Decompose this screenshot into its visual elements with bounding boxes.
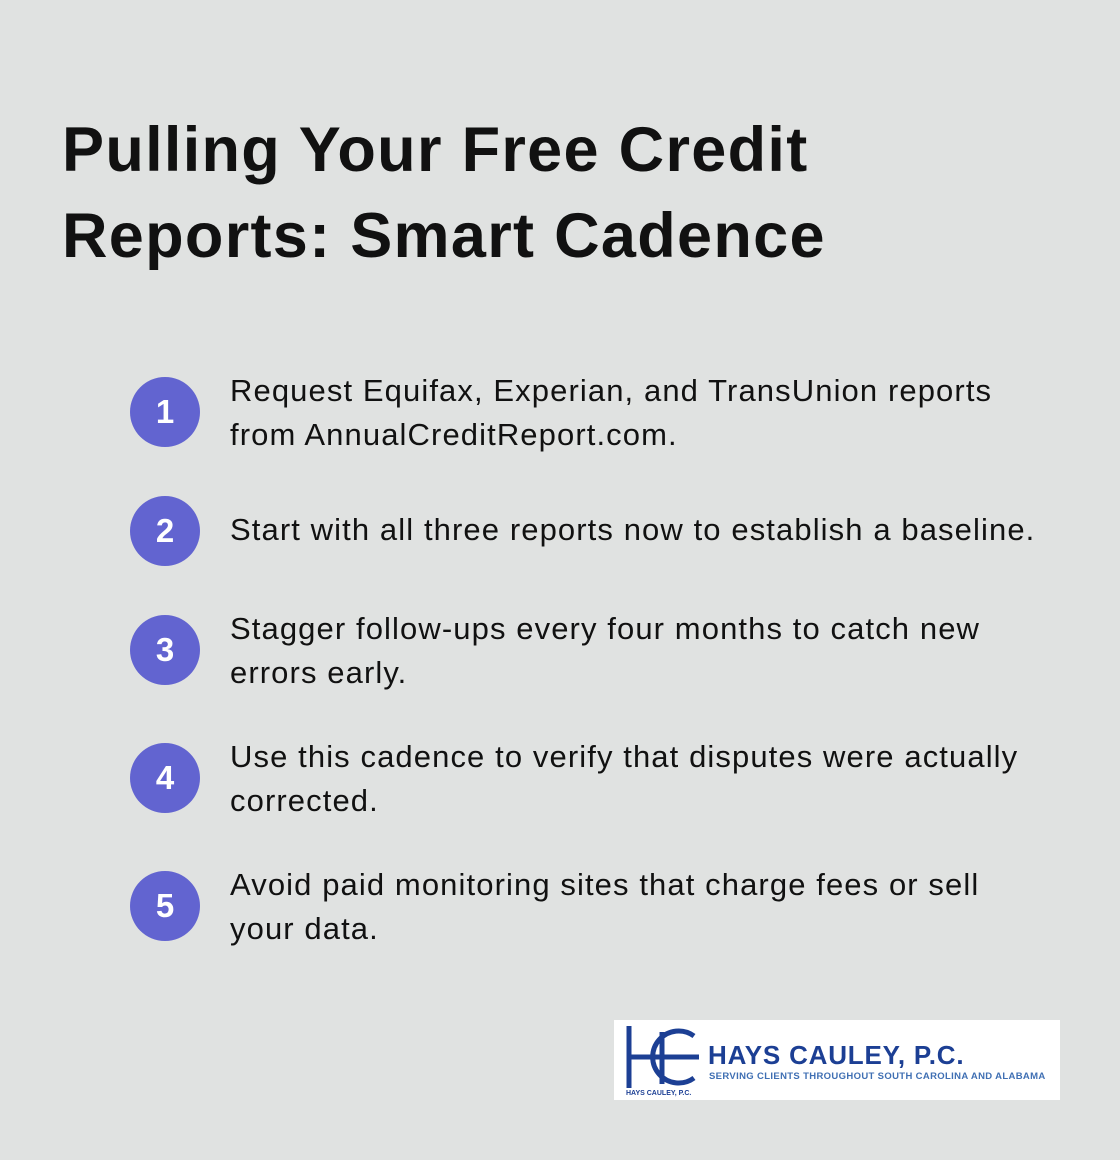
text 1: Request Equifax, Experian, and TransUnion reports (230, 373, 992, 408)
badge 1: 1 (156, 393, 174, 430)
text 4 (230, 739, 1018, 818)
logo mark (626, 1026, 699, 1088)
logo small text: HAYS CAULEY, P.C. (626, 1090, 691, 1097)
text 1 (230, 373, 992, 452)
badge 1 (130, 377, 200, 447)
title: Pulling Your Free Credit (62, 115, 808, 185)
badge 4: 4 (156, 759, 174, 796)
item 2 (130, 496, 1035, 566)
item 1 (130, 373, 992, 452)
text 1: from AnnualCreditReport.com. (230, 417, 678, 452)
badge 2: 2 (156, 512, 174, 549)
badge 5: 5 (156, 887, 174, 924)
item 3 (130, 611, 980, 690)
badge 5 (130, 871, 200, 941)
text 5 (230, 867, 979, 946)
badge 3 (130, 615, 200, 685)
logo tagline: SERVING CLIENTS THROUGHOUT SOUTH CAROLINA AND ALABAMA (709, 1071, 1046, 1082)
text 4: corrected. (230, 783, 379, 818)
badge 2 (130, 496, 200, 566)
text 4: Use this cadence to verify that disputes were actually (230, 739, 1018, 774)
text 2: Start with all three reports now to establish a baseline. (230, 512, 1035, 547)
item 4 (130, 739, 1018, 818)
title: Reports: Smart Cadence (62, 201, 826, 271)
logo (614, 1020, 1060, 1100)
title (62, 115, 826, 271)
text 3 (230, 611, 980, 690)
text 5: your data. (230, 911, 379, 946)
text 3: Stagger follow-ups every four months to catch new (230, 611, 980, 646)
logo name: HAYS CAULEY, P.C. (708, 1040, 964, 1070)
text 5: Avoid paid monitoring sites that charge fees or sell (230, 867, 979, 902)
text 3: errors early. (230, 655, 407, 690)
badge 4 (130, 743, 200, 813)
item 5 (130, 867, 979, 946)
badge 3: 3 (156, 631, 174, 668)
